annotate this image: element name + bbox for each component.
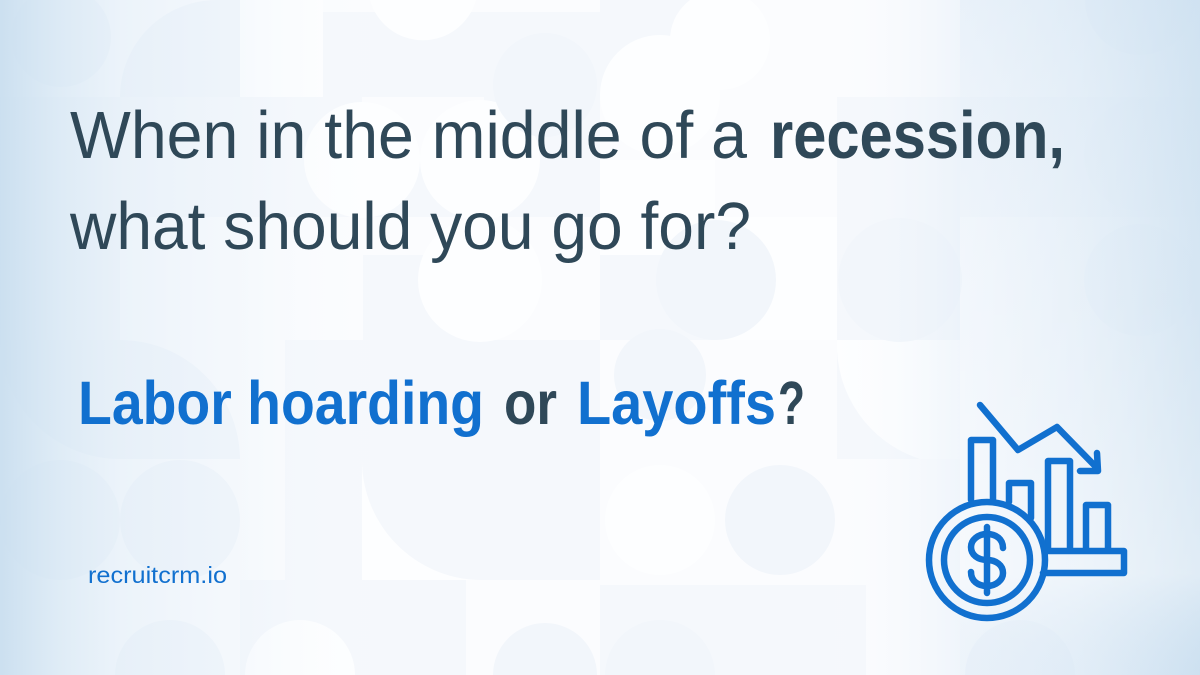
- subheading: labor hoarding or layoffs: or: [504, 369, 557, 437]
- subheading: labor hoarding or layoffs: Layoffs: [577, 369, 776, 437]
- heading: recession question: recession,: [770, 98, 1065, 173]
- icon: bars: [971, 440, 1108, 550]
- subheading: labor hoarding or layoffs: Labor hoarding: [78, 369, 484, 437]
- heading: recession question: When in the middle of a: [70, 98, 748, 173]
- subheading: labor hoarding or layoffs: [78, 369, 805, 437]
- icon: dollar coin: [929, 502, 1045, 618]
- subheading: labor hoarding or layoffs: ?: [778, 369, 805, 437]
- heading: recession question: what should you go for?: [69, 189, 751, 264]
- icon: chart base: [1043, 551, 1124, 573]
- heading: recession question: [69, 98, 1065, 264]
- website label: recruitcrm.io: [88, 562, 227, 588]
- icon: downward trend arrow: [980, 405, 1098, 471]
- icon: falling chart with dollar coin: [929, 405, 1124, 618]
